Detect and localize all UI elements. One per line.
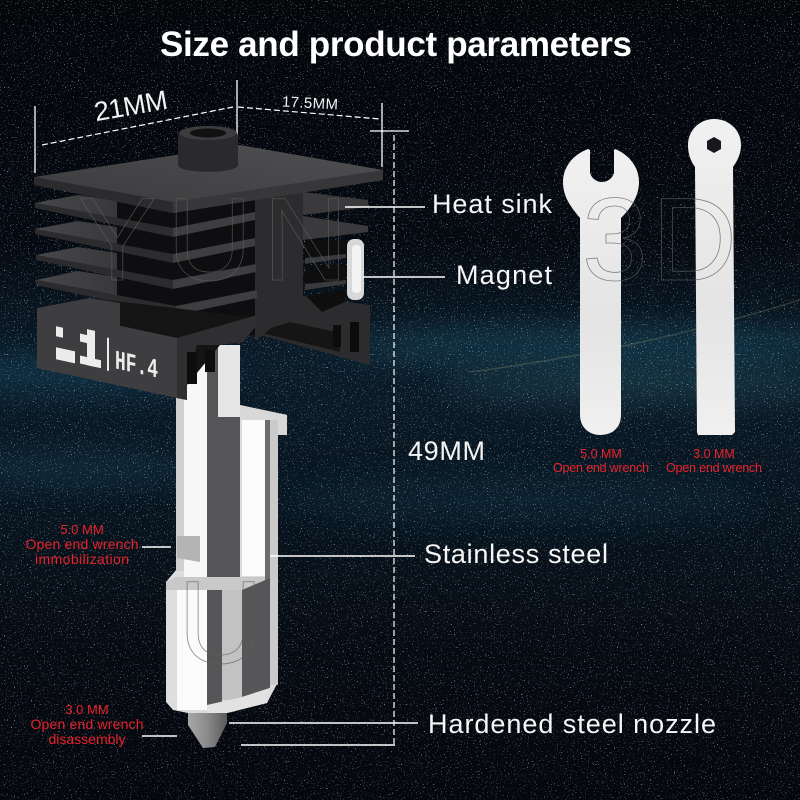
left fins (35, 195, 257, 315)
watermark YUN 3D: 3D (582, 174, 737, 306)
red note: 3.0 mm wrench: Open end wrench (666, 461, 762, 475)
watermark YUN 3D: U (178, 557, 263, 689)
red note: 5.0 mm wrench (553, 447, 649, 475)
magnet (347, 239, 364, 300)
red note: immobilization: 5.0 MM (60, 522, 104, 537)
label: Stainless steel: Stainless steel (424, 539, 608, 569)
red note: disassembly: Open end wrench (30, 716, 144, 732)
leader lines (142, 207, 445, 745)
watermark YUN 3D: YUN (78, 174, 348, 306)
label: Magnet: Magnet (456, 260, 552, 290)
brand logo (56, 322, 158, 387)
top post (178, 128, 238, 172)
wrench flat notch (177, 536, 200, 562)
red note: 5.0 mm wrench: 5.0 MM (580, 447, 622, 461)
label: Heat sink: Heat sink (432, 189, 552, 219)
front block (37, 298, 257, 400)
watermark YUN 3D (78, 174, 737, 689)
hardened steel nozzle (188, 713, 227, 748)
wrench: 3.0 mm (688, 119, 741, 435)
red note: 3.0 mm wrench: 3.0 MM (693, 447, 735, 461)
dimension lines (35, 80, 409, 745)
red note: 3.0 mm wrench (666, 447, 762, 475)
heat sink (34, 126, 383, 400)
red note: 5.0 mm wrench: Open end wrench (553, 461, 649, 475)
right fins (303, 192, 368, 312)
central core (255, 190, 303, 340)
red note: disassembly: 3.0 MM (65, 702, 109, 717)
stainless steel tube (166, 345, 287, 713)
dimension label: 17.5MM: 17.5MM (282, 94, 338, 113)
red note: immobilization: immobilization (35, 551, 129, 567)
top plate (34, 145, 383, 213)
label: Hardened steel nozzle: Hardened steel nozzle (428, 709, 716, 739)
dimension label: 49MM: 49MM (408, 436, 485, 466)
wrench: 5.0 mm (563, 149, 639, 435)
red note: immobilization (26, 522, 138, 567)
red note: disassembly (30, 702, 144, 747)
title: Size and product parameters (160, 25, 632, 64)
rear block (253, 296, 370, 365)
brand logo: HF.4 (115, 347, 158, 387)
dimension label: 21MM: 21MM (92, 85, 170, 127)
red note: disassembly: disassembly (48, 731, 126, 747)
red note: immobilization: Open end wrench (26, 536, 138, 552)
